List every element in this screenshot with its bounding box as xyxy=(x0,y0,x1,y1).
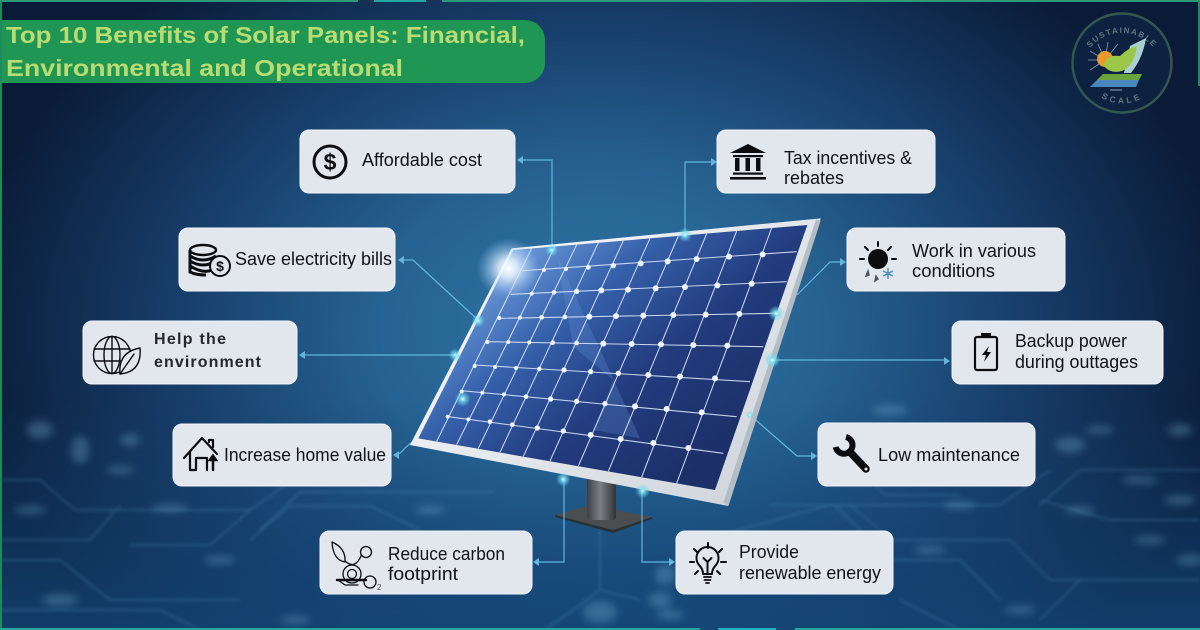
photovoltaic cells xyxy=(418,225,807,490)
icon: light bulb xyxy=(690,543,726,583)
label line 2: footprint xyxy=(388,563,458,584)
connection glow points xyxy=(448,228,784,498)
panel reflection xyxy=(557,255,640,438)
logo top text: SUSTAINABLE xyxy=(1086,27,1156,47)
icon: bank building xyxy=(730,144,766,180)
label: Backup power xyxy=(1015,330,1127,351)
icon: coins xyxy=(190,245,230,276)
horizontal grid lines xyxy=(448,252,797,453)
connector: Tax incentives xyxy=(685,158,717,235)
label line 2: during outtages xyxy=(1015,351,1138,372)
sun glare xyxy=(477,238,540,298)
solar panel xyxy=(410,218,821,506)
title banner xyxy=(2,20,545,83)
icon subscript: 2 xyxy=(377,583,382,592)
icon: dollar coin xyxy=(314,146,346,178)
connector: Save electricity bills xyxy=(398,256,478,320)
logo solar panel xyxy=(1090,74,1142,90)
label line 2: renewable energy xyxy=(739,562,882,583)
icon: carbon reduction xyxy=(332,542,376,588)
connector: Work in various conditions xyxy=(797,258,846,295)
logo sun xyxy=(1088,42,1118,70)
card: Help the environment xyxy=(83,321,297,384)
icon: coins: $ xyxy=(216,258,224,274)
logo: Sustainable Scale xyxy=(1071,12,1173,114)
connector: Help the environment xyxy=(299,351,458,359)
panel frame xyxy=(410,218,821,506)
connector: Backup power xyxy=(772,357,950,365)
label: Help the xyxy=(154,331,226,348)
solar panel stand xyxy=(555,478,652,533)
icon: battery xyxy=(975,333,997,370)
card: Save electricity bills xyxy=(179,228,395,291)
connector: Reduce carbon footprint xyxy=(533,480,564,566)
card: Tax incentives and rebates xyxy=(717,130,935,193)
icon: dollar coin: $ xyxy=(324,149,337,175)
label: Save electricity bills xyxy=(235,248,392,269)
label: Low maintenance xyxy=(878,444,1020,465)
card: Work in various conditions xyxy=(847,228,1065,291)
icon: sun, rain and snow xyxy=(860,242,896,281)
connector: Affordable cost xyxy=(517,156,552,250)
logo bottom text: SCALE xyxy=(1102,93,1140,104)
vertical grid lines xyxy=(437,228,772,483)
grid junction dots xyxy=(446,252,765,451)
label: Reduce carbon xyxy=(388,543,505,564)
title line 2: Environmental and Operational xyxy=(6,55,403,81)
label line 2: rebates xyxy=(784,167,844,188)
card: Affordable cost xyxy=(300,130,515,193)
icon: globe with leaf xyxy=(94,336,140,374)
label: Work in various xyxy=(912,240,1036,261)
label line 2: conditions xyxy=(912,260,995,281)
icon: wrench xyxy=(836,437,868,470)
card: Increase home value xyxy=(173,424,391,486)
circuit board nodes xyxy=(14,405,1200,624)
circuit board traces xyxy=(0,440,1200,630)
label: Affordable cost xyxy=(362,149,482,170)
label: Provide xyxy=(739,541,799,562)
label line 2: environment xyxy=(154,354,262,371)
connector: Provide renewable energy xyxy=(642,492,675,566)
card: Backup power xyxy=(952,321,1163,384)
logo leaf xyxy=(1104,38,1146,73)
card: Reduce carbon footprint xyxy=(320,531,532,594)
connector: Low maintenance xyxy=(750,415,817,460)
card: Low maintenance xyxy=(818,423,1035,486)
icon: house with arrow xyxy=(184,438,218,470)
connector: Increase home value xyxy=(393,398,463,459)
card: Provide renewable energy xyxy=(676,531,893,594)
label: Tax incentives & xyxy=(784,147,913,168)
title line 1: Top 10 Benefits of Solar Panels: Financial, xyxy=(6,22,525,48)
label: Increase home value xyxy=(224,444,386,465)
